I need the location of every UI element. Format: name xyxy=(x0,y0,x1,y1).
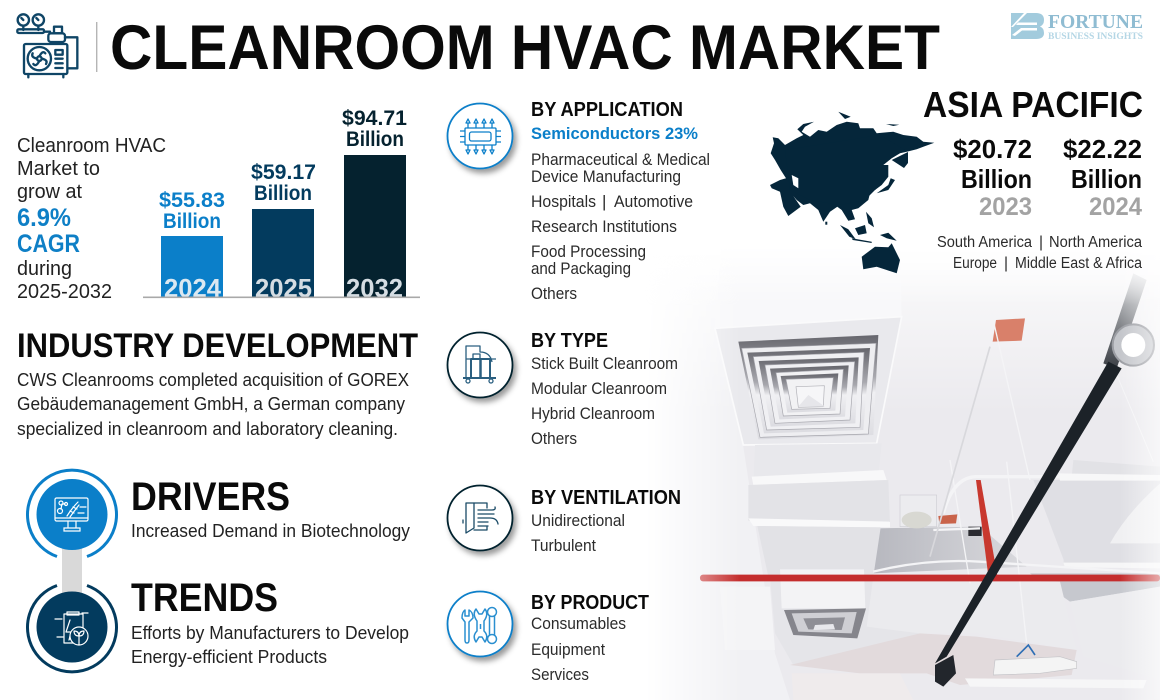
CAGR text block: grow at xyxy=(17,181,82,203)
CAGR text block: CAGR xyxy=(17,230,80,258)
industry development: INDUSTRY DEVELOPMENT xyxy=(17,327,418,365)
map: Asia Pacific xyxy=(770,112,934,273)
industry development xyxy=(17,327,418,439)
map inland sea xyxy=(792,175,798,188)
trends text xyxy=(131,576,409,667)
bar 2032: Billion xyxy=(346,127,404,151)
regional value 2023: $20.72 xyxy=(953,134,1032,164)
regional value 2023: 2023 xyxy=(979,193,1032,221)
bar 2025: $59.17 xyxy=(251,160,316,184)
bar 2025: Billion xyxy=(254,181,312,205)
bar 2025: 2025 xyxy=(255,273,312,303)
header divider xyxy=(96,22,97,72)
icon: semiconductor chip xyxy=(448,104,512,168)
bar 2024: $55.83 xyxy=(159,188,225,212)
other regions xyxy=(937,234,1142,272)
drivers text xyxy=(131,475,411,541)
title: CLEANROOM HVAC MARKET xyxy=(110,13,940,83)
asia pacific heading: ASIA PACIFIC xyxy=(923,84,1143,125)
logo: Fortune Business Insights: BUSINESS INSIGHTS xyxy=(1048,32,1143,42)
bar 2032: $94.71 xyxy=(342,106,407,130)
other regions: | xyxy=(1004,255,1008,272)
CAGR text block: during xyxy=(17,258,72,280)
bar chart: market size xyxy=(143,106,420,303)
regional value 2023: Billion xyxy=(961,164,1032,194)
other regions: North America xyxy=(1049,234,1142,251)
by product: Consumables xyxy=(531,614,626,633)
by product: Services xyxy=(531,665,589,684)
by application: Automotive xyxy=(614,192,693,211)
by application: Research Institutions xyxy=(531,217,677,236)
by ventilation: Unidirectional xyxy=(531,511,625,530)
connector between drivers and trends xyxy=(62,548,82,594)
by application: Device Manufacturing xyxy=(531,167,681,186)
by type: Modular Cleanroom xyxy=(531,379,667,398)
by type: BY TYPE xyxy=(531,330,608,352)
by application: and Packaging xyxy=(531,259,631,278)
regional value 2024: Billion xyxy=(1071,164,1142,194)
by application: Others xyxy=(531,284,577,303)
by type: Hybrid Cleanroom xyxy=(531,404,655,423)
CAGR text block: 2025-2032 xyxy=(17,281,112,303)
industry development: CWS Cleanrooms completed acquisition of GOREX xyxy=(17,369,409,390)
by application: Food Processing xyxy=(531,242,646,261)
by product: Equipment xyxy=(531,640,605,659)
industry development: specialized in cleanroom and laboratory cleaning. xyxy=(17,418,398,439)
icon: modular cleanroom xyxy=(448,332,512,398)
by type xyxy=(531,330,678,448)
bar 2024 xyxy=(159,188,225,303)
by type: Stick Built Cleanroom xyxy=(531,354,678,373)
icon: drivers badge xyxy=(28,470,117,556)
regional value 2024 xyxy=(1063,134,1142,221)
logo: Fortune Business Insights xyxy=(1011,12,1143,42)
background photo: cleanroom ceiling ducts xyxy=(700,274,1160,700)
by application: BY APPLICATION xyxy=(531,99,683,121)
by application: Semiconductors 23% xyxy=(531,124,698,143)
bar 2024: 2024 xyxy=(164,273,222,303)
drivers text: Increased Demand in Biotechnology xyxy=(131,520,411,541)
trends text: Efforts by Manufacturers to Develop xyxy=(131,622,409,643)
by application xyxy=(531,99,710,303)
other regions: | xyxy=(1039,234,1043,251)
header icon: HVAC compressor unit xyxy=(17,14,77,77)
by application: Hospitals xyxy=(531,192,596,211)
bar 2032: 2032 xyxy=(346,273,403,303)
by type: Others xyxy=(531,429,577,448)
CAGR text block: Market to xyxy=(17,158,100,180)
regional value 2023 xyxy=(953,134,1032,221)
logo: Fortune Business Insights: FORTUNE xyxy=(1048,12,1143,33)
other regions: Europe xyxy=(953,255,997,272)
by ventilation: BY VENTILATION xyxy=(531,487,681,509)
by ventilation xyxy=(531,487,681,555)
CAGR text block: 6.9% xyxy=(17,204,71,232)
regional value 2024: $22.22 xyxy=(1063,134,1142,164)
icon: trends badge xyxy=(28,586,117,672)
industry development: Gebäudemanagement GmbH, a German company xyxy=(17,393,406,414)
bar 2024: Billion xyxy=(163,209,221,233)
CAGR text block: Cleanroom HVAC xyxy=(17,135,166,157)
by ventilation: Turbulent xyxy=(531,536,596,555)
trends text: TRENDS xyxy=(131,576,278,620)
bar 2032 xyxy=(342,106,407,303)
drivers text: DRIVERS xyxy=(131,475,290,519)
other regions: South America xyxy=(937,234,1032,251)
by application: Pharmaceutical & Medical xyxy=(531,150,710,169)
other regions: Middle East & Africa xyxy=(1015,255,1142,272)
by product xyxy=(531,592,649,684)
regional value 2024: 2024 xyxy=(1089,193,1142,221)
trends text: Energy-efficient Products xyxy=(131,646,327,667)
icon: tools wrenches xyxy=(448,592,512,656)
bar 2025 xyxy=(251,160,316,303)
by application: | xyxy=(602,192,606,211)
icon: ventilation door and airflow xyxy=(448,486,512,550)
by product: BY PRODUCT xyxy=(531,592,649,614)
CAGR text block xyxy=(17,135,166,303)
